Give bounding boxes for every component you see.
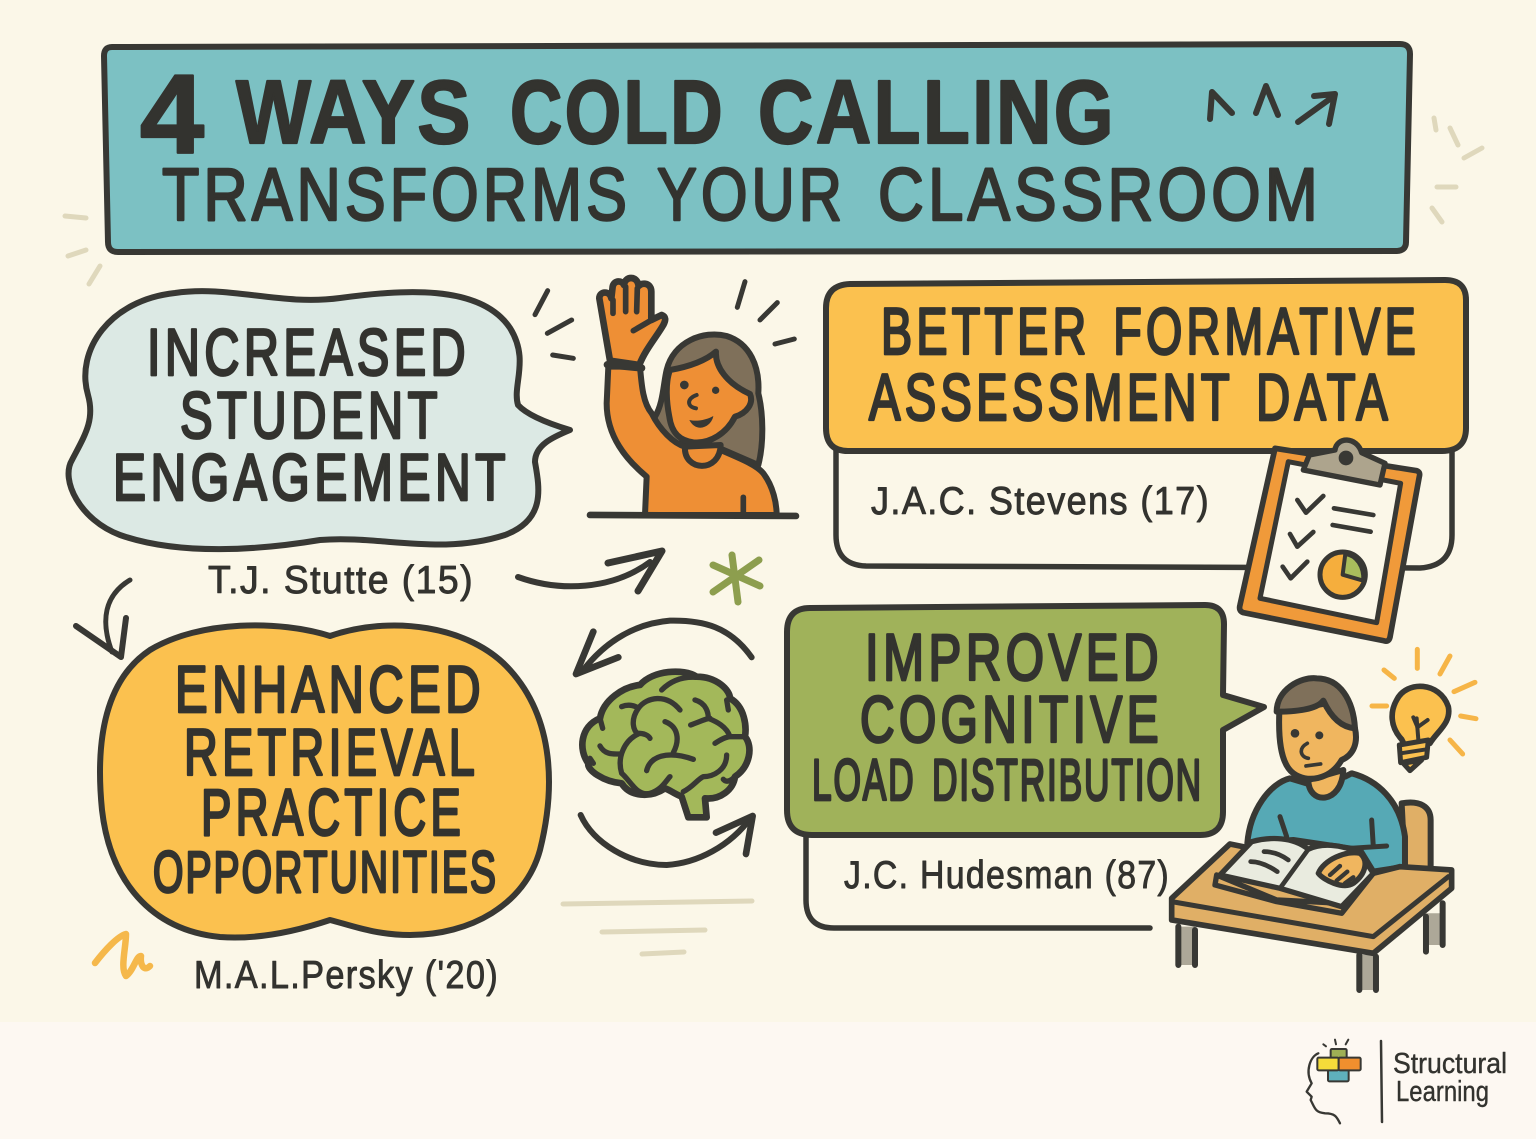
citation box (836, 450, 1452, 568)
hand (1318, 853, 1365, 886)
torso (1247, 773, 1405, 872)
panel: enhanced retrieval practice opportunities (100, 625, 549, 997)
heading box (826, 280, 1466, 451)
speech bubble (69, 291, 570, 549)
heading: COGNITIVE (860, 682, 1163, 756)
citation: M.A.L.Persky ('20) (194, 954, 499, 997)
wordmark (1393, 1048, 1507, 1108)
citation: J.C. Hudesman (87) (844, 854, 1170, 897)
heading box with speech tail (787, 605, 1264, 835)
logo: Structural Learning (1307, 1040, 1507, 1123)
decorative sparks (65, 118, 1482, 284)
icon: clipboard with checklist (1240, 440, 1420, 641)
heading: ENHANCED (175, 652, 485, 726)
heading: IMPROVED (865, 620, 1163, 694)
title line 2 (162, 153, 1322, 236)
lightbulb (1392, 686, 1449, 746)
icon: orange squiggle (95, 934, 150, 976)
heading (113, 315, 510, 514)
wordmark: Learning (1396, 1076, 1489, 1108)
divider (1381, 1041, 1382, 1122)
chair (1402, 802, 1431, 870)
heading: RETRIEVAL (184, 715, 479, 789)
book (1215, 873, 1373, 913)
citation: J.A.C. Stevens (17) (871, 480, 1210, 523)
title line 1: WAYS (236, 63, 473, 163)
title line 2: YOUR (657, 153, 846, 236)
desk legs (1178, 913, 1443, 990)
heading: STUDENT (180, 378, 442, 452)
citation: T.J. Stutte (15) (208, 559, 474, 602)
icon: emphasis arrows (1210, 86, 1335, 124)
icon: green asterisk (713, 555, 760, 602)
blob shape (100, 625, 549, 938)
heading: INCREASED (147, 315, 470, 389)
title line 1: COLD (510, 63, 725, 163)
neck (1308, 770, 1343, 798)
title line 1: 4 (140, 52, 204, 177)
wordmark: Structural (1393, 1048, 1507, 1080)
heading: PRACTICE (201, 775, 465, 849)
heading (812, 620, 1203, 813)
icon: student reading at desk (1172, 649, 1476, 990)
title line 1: CALLING (758, 63, 1116, 163)
hair (1277, 678, 1355, 728)
panel: improved cognitive load distribution (787, 605, 1264, 928)
title line 2: TRANSFORMS (162, 153, 631, 236)
title banner (104, 44, 1410, 252)
title line 2: CLASSROOM (878, 153, 1322, 236)
heading (153, 652, 498, 905)
heading (869, 294, 1420, 434)
arrow: curved down-left (76, 580, 130, 657)
panel: increased student engagement (69, 291, 570, 602)
heading: OPPORTUNITIES (153, 840, 498, 905)
heading: LOAD DISTRIBUTION (812, 748, 1203, 813)
icon: head with blocks (1307, 1040, 1361, 1123)
title line 1 (140, 52, 1116, 177)
icon: brain with cycle arrows (576, 621, 753, 865)
heading: ENGAGEMENT (113, 440, 510, 514)
face (1279, 703, 1356, 779)
icon: student raising hand (535, 278, 796, 516)
arrow: curved to student (518, 551, 662, 591)
panel: better formative assessment data (826, 280, 1466, 568)
decorative pencil lines (563, 901, 752, 954)
desk top (1172, 844, 1452, 953)
citation box (806, 836, 1150, 928)
